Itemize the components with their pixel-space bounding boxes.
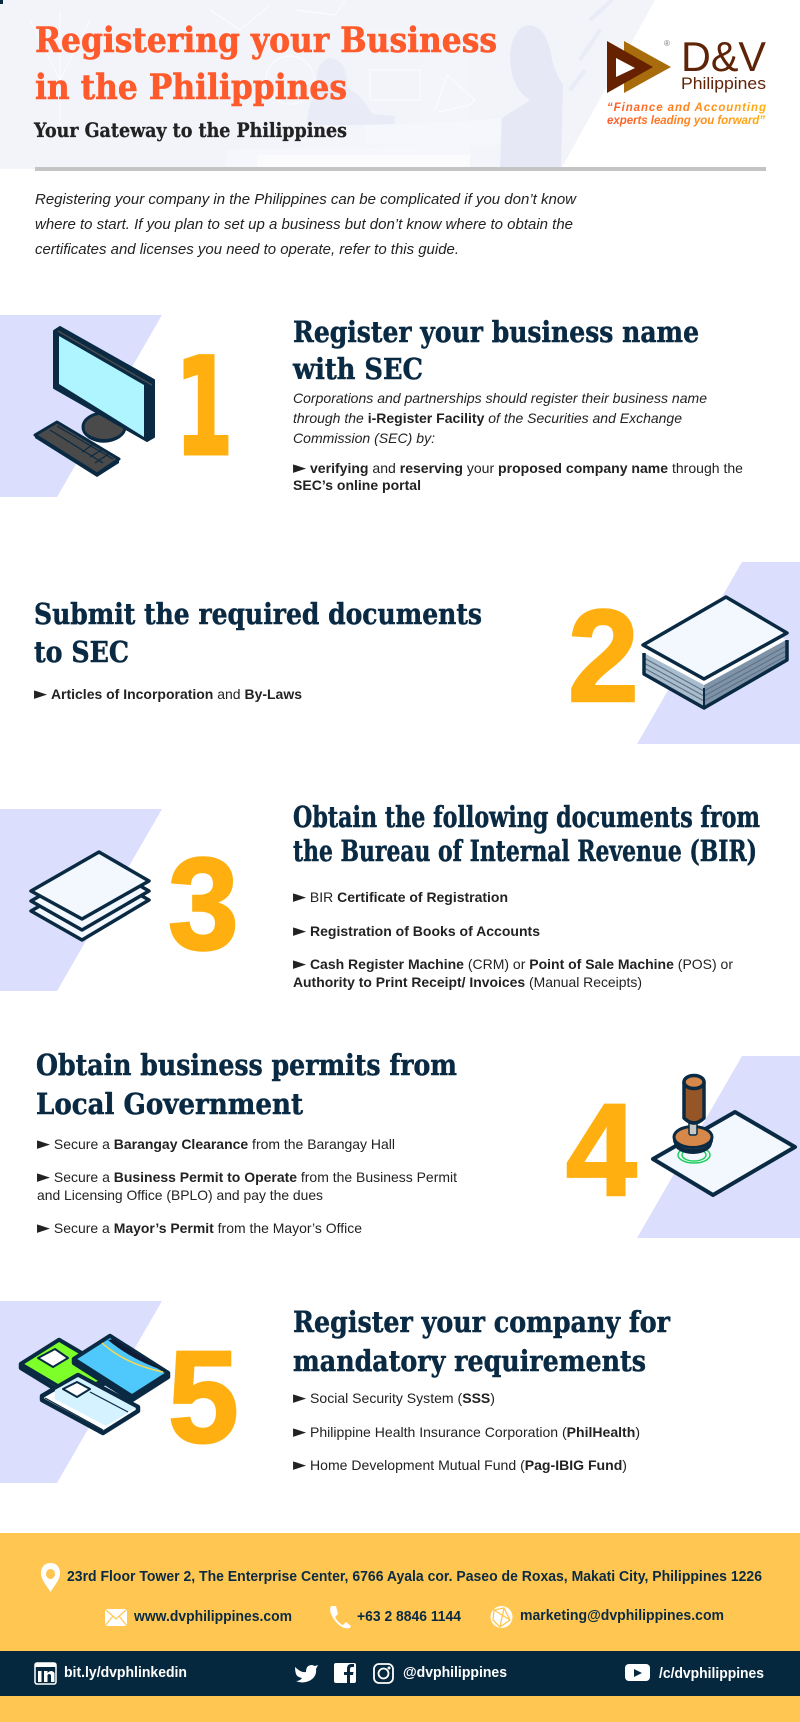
panel: social bar bbox=[0, 1651, 800, 1696]
text: step 4: ► Secure a Mayor’s Permit from the Mayor’s Office bbox=[37, 1218, 362, 1238]
text: step 5: ► Philippine Health Insurance Corporation (PhilHealth) bbox=[293, 1422, 640, 1442]
number 5: 5 bbox=[168, 1324, 239, 1470]
panel: step 1 bbox=[0, 315, 743, 497]
panel: step 2 bbox=[34, 562, 800, 744]
text: step 5: ► Social Security System (SSS) bbox=[293, 1388, 495, 1408]
text: step 1: through the i-Register Facility of the Securities and Exchange bbox=[293, 410, 682, 426]
icon: stamp on paper bbox=[653, 1076, 795, 1195]
phone number: +63 2 8846 1144 bbox=[357, 1609, 461, 1625]
icon: Facebook bbox=[334, 1663, 356, 1683]
logo: D&V Philippines: “Finance and Accounting bbox=[607, 102, 766, 114]
panel: step 4 bbox=[36, 1048, 800, 1238]
text: step 5 bbox=[293, 1388, 640, 1475]
heading: step 1 bbox=[292, 315, 699, 386]
icon: mail bbox=[105, 1609, 127, 1626]
text: step 3: ► Cash Register Machine (CRM) or Point of Sale Machine (POS) or bbox=[293, 954, 733, 974]
heading: step 1: with SEC bbox=[292, 352, 423, 386]
heading: step 4: Obtain business permits from bbox=[36, 1048, 457, 1082]
number 4: 4 bbox=[566, 1077, 637, 1223]
number 2: 2 bbox=[568, 583, 639, 729]
intro text: Registering your company in the Philippines can be complicated if you don’t know bbox=[35, 191, 577, 208]
logo: D&V Philippines: D&V bbox=[681, 33, 766, 80]
text: step 4 bbox=[37, 1134, 457, 1238]
address: 23rd Floor Tower 2, The Enterprise Center, 6766 Ayala cor. Paseo de Roxas, Makati City, Philippines 1226 bbox=[67, 1569, 762, 1585]
heading: step 3 bbox=[293, 800, 760, 868]
title: Registering your Business bbox=[35, 20, 497, 61]
icon: Twitter bbox=[295, 1665, 318, 1682]
text: step 4: and Licensing Office (BPLO) and pay the dues bbox=[37, 1187, 323, 1203]
number 3: 3 bbox=[168, 831, 239, 977]
header banner bbox=[0, 0, 655, 169]
logo: D&V Philippines bbox=[607, 33, 766, 127]
title bbox=[35, 20, 497, 108]
panel: footer contact bbox=[0, 1533, 800, 1722]
subtitle: Your Gateway to the Philippines bbox=[33, 118, 347, 142]
logo: D&V Philippines: ® bbox=[664, 39, 670, 48]
icon: globe bbox=[490, 1606, 512, 1628]
number 1: 1 bbox=[175, 330, 233, 486]
intro text: certificates and licenses you need to operate, refer to this guide. bbox=[35, 241, 459, 258]
text: step 1 bbox=[293, 390, 743, 493]
instagram handle: @dvphilippines bbox=[403, 1665, 507, 1681]
title: in the Philippines bbox=[35, 67, 347, 108]
icon: desktop computer bbox=[35, 327, 154, 477]
text: step 3: Authority to Print Receipt/ Invoices (Manual Receipts) bbox=[293, 974, 642, 990]
text: step 3: ► BIR Certificate of Registration bbox=[293, 887, 508, 907]
heading: step 5 bbox=[293, 1305, 671, 1378]
heading: step 5: mandatory requirements bbox=[293, 1344, 646, 1378]
panel: step 3 bbox=[0, 800, 760, 991]
text: step 1: Commission (SEC) by: bbox=[293, 430, 435, 446]
text: step 1: SEC’s online portal bbox=[293, 477, 421, 493]
heading: step 4: Local Government bbox=[36, 1087, 304, 1121]
youtube channel: /c/dvphilippines bbox=[659, 1666, 764, 1682]
text: step 3: ► Registration of Books of Accounts bbox=[293, 921, 540, 941]
panel: step 5 bbox=[0, 1301, 671, 1483]
icon: three sheets bbox=[31, 852, 149, 940]
intro text bbox=[35, 191, 577, 258]
logo: D&V Philippines: Philippines bbox=[681, 74, 766, 93]
email: marketing@dvphilippines.com bbox=[520, 1608, 724, 1624]
heading: step 2 bbox=[34, 597, 482, 669]
icon: LinkedIn bbox=[35, 1663, 56, 1684]
text: step 1: Corporations and partnerships should register their business name bbox=[293, 390, 707, 406]
text: step 3 bbox=[293, 887, 733, 990]
text: step 1: ► verifying and reserving your proposed company name through the bbox=[293, 458, 743, 478]
text: step 2: ► Articles of Incorporation and By-Laws bbox=[34, 684, 302, 704]
logo: D&V Philippines: experts leading you forward” bbox=[607, 115, 765, 127]
icon: Instagram bbox=[374, 1664, 393, 1683]
heading: step 2: Submit the required documents bbox=[34, 597, 482, 631]
icon: YouTube bbox=[625, 1664, 650, 1681]
icon: location pin bbox=[41, 1563, 60, 1592]
text: step 4: ► Secure a Barangay Clearance from the Barangay Hall bbox=[37, 1134, 395, 1154]
intro text: where to start. If you plan to set up a business but don’t know where to obtain the bbox=[35, 216, 573, 233]
icon: paper stack bbox=[643, 597, 787, 708]
icon: ID cards bbox=[21, 1336, 168, 1433]
linkedin url: bit.ly/dvphlinkedin bbox=[64, 1665, 187, 1681]
heading: step 4 bbox=[36, 1048, 457, 1121]
text: step 4: ► Secure a Business Permit to Operate from the Business Permit bbox=[37, 1167, 457, 1187]
heading: step 1: Register your business name bbox=[293, 315, 699, 349]
heading: step 5: Register your company for bbox=[293, 1305, 671, 1339]
heading: step 2: to SEC bbox=[34, 635, 129, 669]
text: step 5: ► Home Development Mutual Fund (Pag-IBIG Fund) bbox=[293, 1455, 627, 1475]
website: www.dvphilippines.com bbox=[133, 1609, 292, 1625]
icon: phone bbox=[330, 1606, 351, 1628]
